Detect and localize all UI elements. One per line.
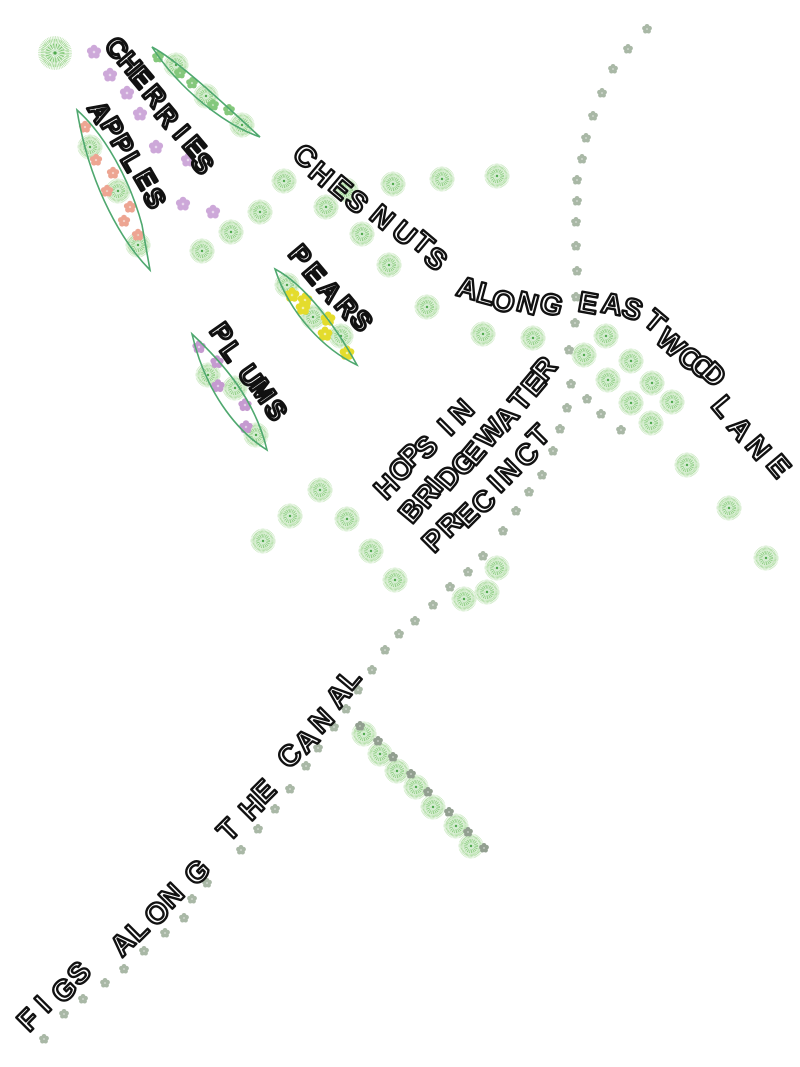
label: hops in bridgewater precinct: PRECINCT [416, 419, 557, 559]
fig plants: darker grey line on canal spur [355, 721, 489, 852]
label: hops in bridgewater precinct: BRIDGEWATER [393, 351, 564, 529]
label: figs along the canal: FIGS ALONG THE CANAL [11, 662, 368, 1038]
trees: canal spur [354, 724, 482, 856]
apple blossoms: salmon [79, 121, 144, 241]
cherry blossoms: purple [87, 45, 220, 219]
plum blossoms: purple [192, 340, 253, 433]
label: cherries: CHERRIES [99, 31, 219, 180]
label: chesnuts along eastwood lane: CHESNUTS ALONG EASTWOOD LANE [287, 138, 797, 484]
leaf outline: apples [77, 110, 150, 270]
label: apples: APPLES [82, 96, 172, 214]
label: hops in bridgewater precinct: HOPS IN [368, 394, 481, 506]
trees: pears and plums [198, 274, 352, 446]
trees: orchard row and chestnuts [41, 39, 543, 348]
label: pears: PEARS [283, 239, 378, 337]
leaf outline: pears [275, 269, 357, 365]
pear blossoms: yellow [285, 288, 354, 360]
trees: eastwood lane cluster [574, 326, 776, 568]
leaf outline: cherries [152, 47, 260, 137]
hop plants: grey line along the canal and lane [39, 24, 652, 1044]
leaf outline: plums [192, 334, 267, 450]
label: plums: PLUMS [204, 317, 293, 426]
green blossoms in top leaf [152, 51, 235, 115]
trees: bridgewater precinct [252, 480, 508, 610]
